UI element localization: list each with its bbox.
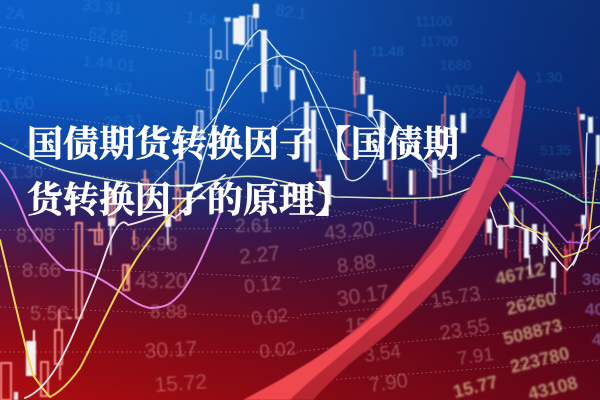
faded data numbers: .49 bbox=[6, 35, 30, 54]
faded data numbers: 34.98 bbox=[130, 234, 178, 255]
faded data numbers: 46712 bbox=[494, 259, 547, 289]
faded data numbers: 508873 bbox=[501, 315, 564, 349]
faded data numbers: 15.73 bbox=[429, 283, 482, 313]
faded data numbers: 0.12 bbox=[243, 273, 282, 298]
faded data numbers: 15 bbox=[345, 315, 367, 337]
faded data numbers: 26.31 bbox=[103, 112, 144, 132]
arrow shaft shadow band bbox=[262, 158, 513, 400]
arrow shaft light band bbox=[243, 155, 498, 400]
line: pink-violet MA bbox=[0, 170, 222, 308]
faded data numbers: 7.90 bbox=[368, 370, 409, 397]
faded data numbers: 1.38 bbox=[140, 167, 169, 184]
faded data numbers: 23.55 bbox=[438, 315, 491, 345]
faded data numbers: 3.54 bbox=[363, 341, 403, 367]
faded data numbers: 1.64 bbox=[184, 9, 218, 30]
candlesticks: right cluster bbox=[486, 107, 600, 295]
arrow head dark face bbox=[503, 70, 526, 173]
faded data numbers: 15.72 bbox=[154, 370, 208, 397]
faded data numbers: 11700 bbox=[420, 33, 458, 49]
faded data numbers: 8.66 bbox=[22, 260, 61, 282]
rising arrow bbox=[243, 70, 526, 400]
arrow head light face bbox=[481, 70, 518, 158]
line: white lower MA bbox=[25, 175, 225, 398]
faded data numbers: 10754 bbox=[445, 82, 484, 98]
title line 2: 货转换因子的原理】 bbox=[27, 180, 351, 220]
faded data numbers: 82.1 bbox=[274, 2, 308, 23]
faded data numbers: 2A bbox=[5, 5, 26, 24]
faded data numbers: 7.91 bbox=[456, 344, 495, 370]
faded data numbers: 1.67 bbox=[101, 81, 133, 100]
faded data numbers: 5135 bbox=[540, 142, 571, 158]
faded data numbers: 43.20 bbox=[135, 270, 188, 293]
faded data numbers: 8.88 bbox=[336, 251, 377, 278]
faded data numbers: 5004 bbox=[545, 167, 576, 183]
faded data numbers: 11.48 bbox=[370, 43, 404, 59]
faded data numbers: 1.30 bbox=[535, 69, 562, 85]
faded data numbers: 2.27 bbox=[238, 242, 281, 269]
faded data numbers: 8.88 bbox=[150, 302, 187, 323]
candlesticks: lower left red cluster bbox=[1, 170, 180, 400]
faded data numbers: 1.44.01 bbox=[82, 53, 137, 76]
candlesticks: left cluster bbox=[178, 3, 466, 225]
line: yellow MA bbox=[0, 195, 190, 397]
faded data numbers: 30.17 bbox=[335, 281, 391, 311]
faded data numbers: 7.1 bbox=[5, 65, 29, 84]
faded data numbers: 0.02 bbox=[258, 338, 297, 363]
faded data numbers: 8.08 bbox=[16, 225, 55, 247]
faded data numbers: 62.66 bbox=[88, 25, 129, 46]
faded data numbers: 1680 bbox=[440, 57, 471, 73]
faded data numbers: 2.61 bbox=[235, 216, 272, 237]
faded data numbers: 30.17 bbox=[144, 337, 198, 363]
faded data numbers: 43.20 bbox=[323, 218, 375, 245]
faded data numbers: 0.02 bbox=[250, 305, 289, 330]
faded data numbers: 5.56 bbox=[30, 303, 69, 325]
faded data numbers: 11100 bbox=[415, 13, 452, 29]
title line 1: 国债期货转换因子【国债期 bbox=[27, 124, 459, 164]
line: green-cream MA bbox=[0, 143, 480, 198]
faded data numbers: 223780 bbox=[508, 343, 571, 377]
faded data numbers: 1233 bbox=[460, 105, 491, 121]
faded data numbers: 1.30 bbox=[10, 163, 43, 182]
faded data numbers: 2.4 bbox=[10, 135, 34, 154]
faded data numbers: 26260 bbox=[504, 288, 558, 319]
line: blue-white MA rising bbox=[190, 30, 480, 200]
